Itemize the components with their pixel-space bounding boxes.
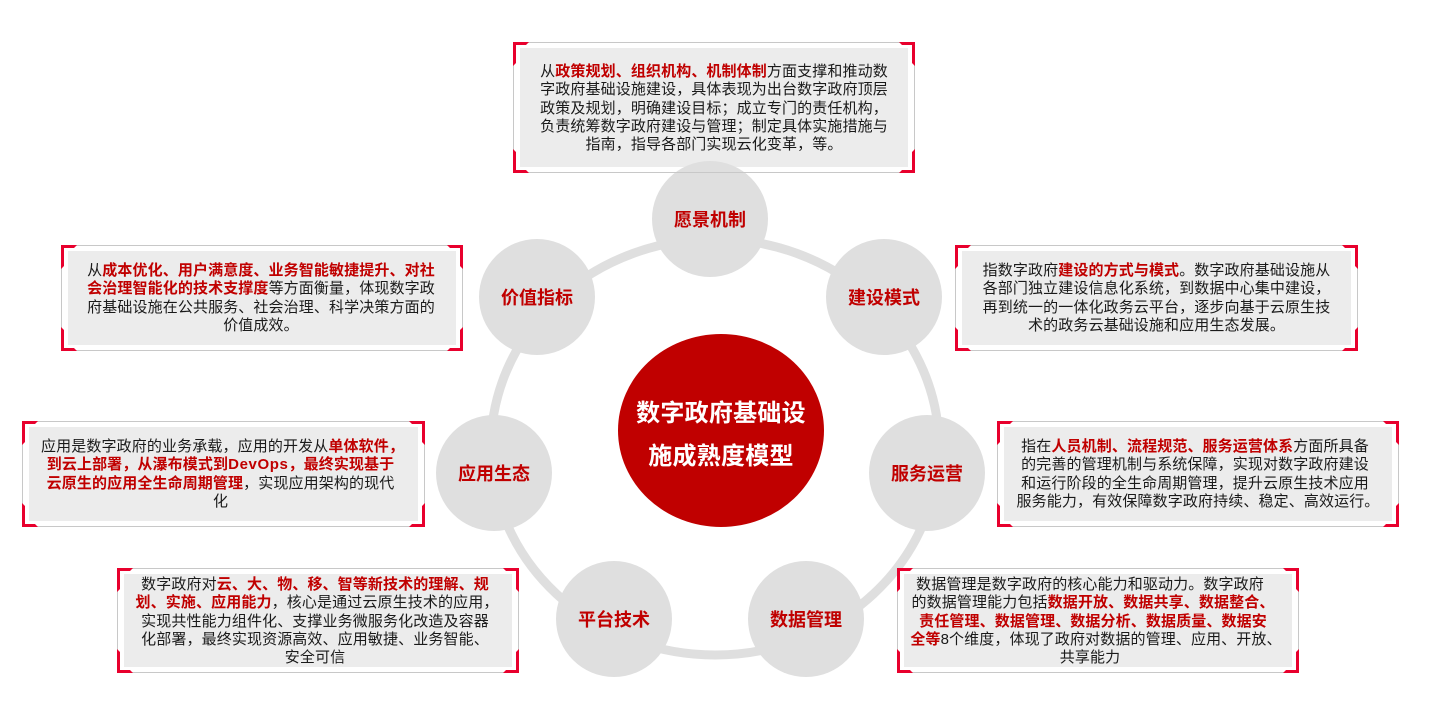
text: 应用生态 description: 应用是数字政府的业务承载，应用的开发从单体软件， <box>41 438 404 455</box>
node: 应用生态 <box>436 415 552 531</box>
text: 愿景机制 description <box>540 63 888 153</box>
node: 平台技术: 平台技术 <box>578 610 650 630</box>
text: 数据管理 description: 共享能力 <box>1060 649 1120 666</box>
text: 建设模式 description: 指数字政府建设的方式与模式。数字政府基础设施从 <box>983 262 1330 279</box>
text: 愿景机制 description: 字政府基础设施建设，具体表现为出台数字政府顶层 <box>540 81 888 98</box>
panel: 应用生态 description <box>22 421 425 527</box>
text: 平台技术 description: 化部署，最终实现资源高效、应用敏捷、业务智能、 <box>141 631 489 648</box>
text: 平台技术 description: 安全可信 <box>285 649 345 666</box>
text: 服务运营 description: 的完善的管理机制与系统保障，实现对数字政府建设 <box>1021 456 1369 473</box>
text: 服务运营 description: 和运行阶段的全生命周期管理，提升云原生技术应用 <box>1021 475 1369 492</box>
panel: 数据管理 description <box>897 568 1299 673</box>
text: 平台技术 description: 数字政府对云、大、物、移、智等新技术的理解、规 <box>141 576 489 593</box>
panel: 愿景机制 description <box>513 42 915 173</box>
text: 平台技术 description: 划、实施、应用能力，核心是通过云原生技术的应用， <box>136 594 498 611</box>
text: 服务运营 description <box>1017 438 1379 510</box>
node: 价值指标: 价值指标 <box>501 288 573 308</box>
text: 数据管理 description: 的数据管理能力包括数据开放、数据共享、数据整合、 <box>912 594 1274 611</box>
text: 应用生态 description: 到云上部署，从瀑布模式到DevOps，最终实现基于 <box>47 456 394 473</box>
node: 服务运营: 服务运营 <box>891 464 963 484</box>
node: 数据管理: 数据管理 <box>770 610 842 630</box>
center circle title: 施成熟度模型 <box>648 443 794 470</box>
text: 价值指标 description: 从成本优化、用户满意度、业务智能敏捷提升、对社 <box>87 262 435 279</box>
center circle title <box>618 334 824 527</box>
node: 建设模式 <box>826 239 942 355</box>
text: 建设模式 description: 各部门独立建设信息化系统，到数据中心集中建设， <box>983 280 1330 297</box>
text: 应用生态 description: 化 <box>213 493 228 510</box>
text: 数据管理 description <box>910 576 1282 666</box>
text: 数据管理 description: 全等8个维度，体现了政府对数据的管理、应用、开放、 <box>910 631 1282 648</box>
center circle title: 数字政府基础设 <box>636 400 806 427</box>
text: 愿景机制 description: 从政策规划、组织机构、机制体制方面支撑和推动数 <box>540 63 888 80</box>
text: 愿景机制 description: 指南，指导各部门实现云化变革，等。 <box>585 136 843 153</box>
text: 应用生态 description: 云原生的应用全生命周期管理，实现应用架构的现代 <box>47 475 394 492</box>
node: 建设模式: 建设模式 <box>848 288 920 308</box>
node: 愿景机制 <box>652 161 768 277</box>
text: 服务运营 description: 服务能力，有效保障数字政府持续、稳定、高效运行。 <box>1017 493 1379 510</box>
text: 应用生态 description <box>41 438 404 510</box>
text: 数据管理 description: 责任管理、数据管理、数据分析、数据质量、数据安 <box>919 613 1267 630</box>
node: 服务运营 <box>869 415 985 531</box>
panel: 建设模式 description <box>955 245 1358 351</box>
text: 愿景机制 description: 政策及规划，明确建设目标；成立专门的责任机构， <box>540 100 888 117</box>
text: 建设模式 description: 术的政务云基础设施和应用生态发展。 <box>1028 317 1285 334</box>
text: 服务运营 description: 指在人员机制、流程规范、服务运营体系方面所具备 <box>1021 438 1369 455</box>
text: 价值指标 description: 府基础设施在公共服务、社会治理、科学决策方面的 <box>87 299 435 316</box>
text: 价值指标 description: 会治理智能化的技术支撑度等方面衡量，体现数字政 <box>87 280 435 297</box>
text: 价值指标 description <box>87 262 435 334</box>
text: 建设模式 description <box>983 262 1330 334</box>
node: 应用生态: 应用生态 <box>458 464 530 484</box>
panel: 价值指标 description <box>61 245 463 351</box>
node: 价值指标 <box>479 239 595 355</box>
node: 愿景机制: 愿景机制 <box>674 210 746 230</box>
text: 愿景机制 description: 负责统筹数字政府建设与管理；制定具体实施措施与 <box>540 118 888 135</box>
text: 建设模式 description: 再到统一的一体化政务云平台，逐步向基于云原生技 <box>983 299 1330 316</box>
panel: 平台技术 description <box>117 568 519 673</box>
text: 平台技术 description: 实现共性能力组件化、支撑业务微服务化改造及容器 <box>141 613 489 630</box>
text: 数据管理 description: 数据管理是数字政府的核心能力和驱动力。数字政府 <box>916 576 1264 593</box>
panel: 服务运营 description <box>997 421 1399 527</box>
text: 平台技术 description <box>136 576 498 666</box>
node: 平台技术 <box>556 561 672 677</box>
node: 数据管理 <box>748 561 864 677</box>
text: 价值指标 description: 价值成效。 <box>223 317 299 334</box>
